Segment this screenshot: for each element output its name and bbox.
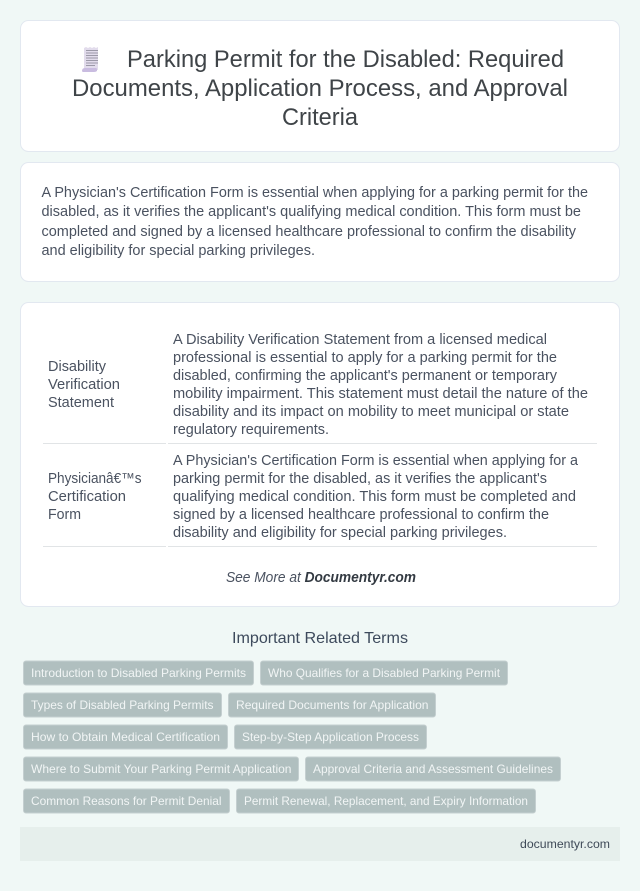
intro text xyxy=(42,185,588,259)
tag: Introduction to Disabled Parking Permits xyxy=(31,666,246,680)
row text: Physician's Certification Form: disability and eligibility for special parking privileges. xyxy=(173,525,507,541)
row text: Physician's Certification Form: qualifying medical condition. This form must be completed and xyxy=(173,489,576,505)
heading: important related terms: Important Related Terms xyxy=(232,630,408,647)
intro text: disabled, as it verifies the applicant's qualifying medical condition. This form must be xyxy=(42,204,581,220)
tag: Approval Criteria and Assessment Guidelines xyxy=(313,762,553,776)
tag: Who Qualifies for a Disabled Parking Permit xyxy=(268,666,501,680)
row text: Disability Verification Statement: professional is essential to apply for a parking permit for the xyxy=(173,350,557,366)
row text: Disability Verification Statement xyxy=(173,332,588,438)
panel: title card xyxy=(20,20,620,152)
intro text: and eligibility for special parking privileges. xyxy=(42,243,315,259)
row label: Physician's Certification Form xyxy=(48,471,142,523)
row text: Physician's Certification Form: signed by a licensed healthcare professional to confirm the xyxy=(173,507,549,523)
tag: Types of Disabled Parking Permits xyxy=(31,698,214,712)
tag xyxy=(24,661,254,685)
icon: document scroll xyxy=(82,47,98,72)
footer bar xyxy=(20,827,620,861)
row text: Physician's Certification Form: A Physician's Certification Form is essential when applying for a xyxy=(173,453,578,469)
see more link: See More at Documentyr.com xyxy=(226,570,416,586)
row label: Disability Verification Statement: Verification xyxy=(48,377,120,393)
tag xyxy=(24,789,230,813)
panel: documents table xyxy=(20,302,620,606)
row text: Physician's Certification Form: parking permit for the disabled, as it verifies the applicant's xyxy=(173,471,547,487)
tag: Where to Submit Your Parking Permit Application xyxy=(31,762,292,776)
row label: Disability Verification Statement xyxy=(48,359,120,411)
row text: Disability Verification Statement: disability and its impact on mobility to meet municipal or state xyxy=(173,404,569,420)
row label: Physician's Certification Form: Physicianâ€™s xyxy=(48,471,142,487)
tag xyxy=(260,661,508,685)
intro text: completed and signed by a licensed healthcare professional to confirm the disability xyxy=(42,224,577,240)
panel: intro paragraph xyxy=(20,162,620,282)
row text: Disability Verification Statement: disabled, confirming the applicant's permanent or temporary xyxy=(173,368,558,384)
tag list xyxy=(24,661,560,813)
tag xyxy=(24,725,228,749)
intro text: A Physician's Certification Form is essential when applying for a parking permit for the xyxy=(42,185,588,201)
row label: Physician's Certification Form: Form xyxy=(48,507,81,523)
row text: Physician's Certification Form xyxy=(173,453,578,541)
tag: How to Obtain Medical Certification xyxy=(31,730,220,744)
title: Criteria xyxy=(282,104,359,131)
row label: Disability Verification Statement: Disability xyxy=(48,359,107,375)
tag xyxy=(24,693,222,717)
row text: Disability Verification Statement: mobility impairment. This statement must detail the nature of the xyxy=(173,386,588,402)
tag xyxy=(306,757,560,781)
tag xyxy=(228,693,436,717)
row text: Disability Verification Statement: A Disability Verification Statement from a licensed medical xyxy=(173,332,547,348)
title: Documents, Application Process, and Approval xyxy=(72,75,568,102)
tag: Step-by-Step Application Process xyxy=(242,730,419,744)
tag: Required Documents for Application xyxy=(236,698,428,712)
row label: Physician's Certification Form: Certification xyxy=(48,489,126,505)
title xyxy=(72,46,568,131)
tag xyxy=(236,789,536,813)
tag: Common Reasons for Permit Denial xyxy=(31,794,222,808)
tag xyxy=(24,757,298,781)
row text: Disability Verification Statement: regulatory requirements. xyxy=(173,422,329,438)
row label: Disability Verification Statement: Statement xyxy=(48,395,114,411)
tag: Permit Renewal, Replacement, and Expiry Information xyxy=(244,794,528,808)
title: Parking Permit for the Disabled: Required xyxy=(127,46,564,73)
footer domain: documentyr.com xyxy=(520,837,610,851)
tag xyxy=(234,725,426,749)
